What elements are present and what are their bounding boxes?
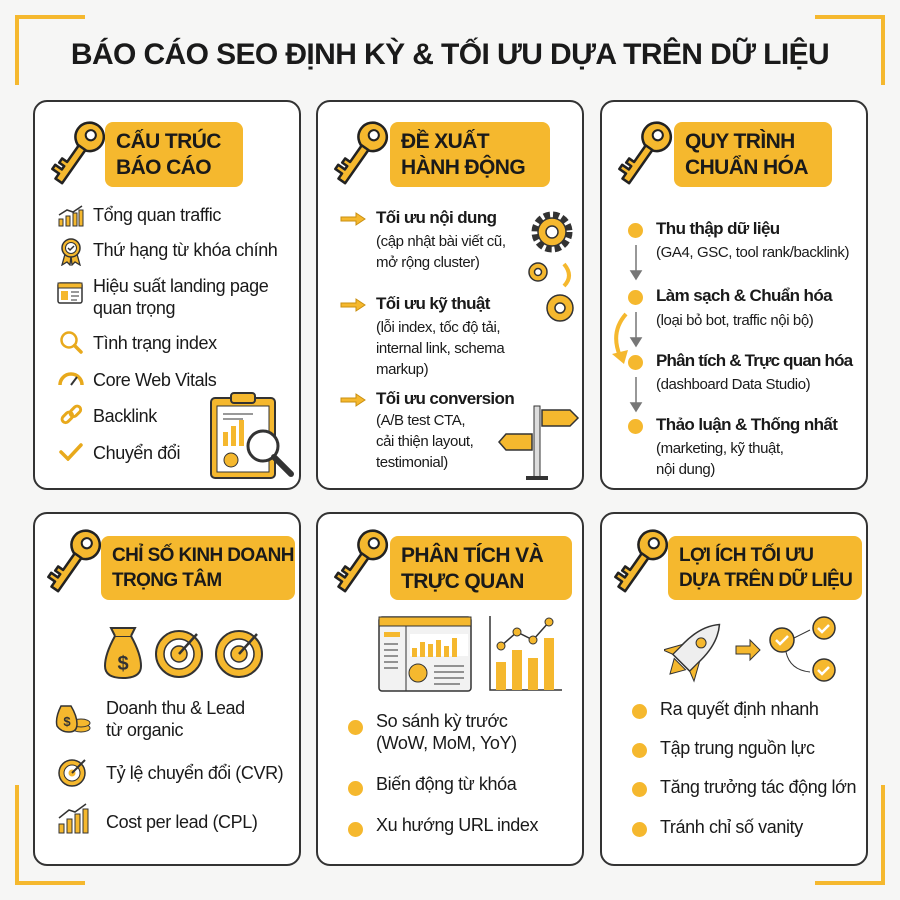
heading badge: TRỌNG TÂM — [112, 570, 222, 591]
heading badge — [390, 122, 550, 187]
panel: phân tích và trực quan — [316, 512, 584, 866]
process steps: (dashboard Data Studio) — [656, 376, 810, 393]
action list: Tối ưu conversion — [376, 389, 514, 408]
process steps: nội dung) — [656, 461, 715, 478]
heading badge: CHUẨN HÓA — [685, 156, 808, 179]
chart: bar + line — [489, 616, 562, 691]
heading badge: CẤU TRÚC — [116, 130, 221, 153]
list items: Core Web Vitals — [93, 370, 216, 390]
heading badge: LỢI ÍCH TỐI ƯU — [679, 545, 813, 566]
action list: mở rộng cluster) — [376, 254, 479, 271]
panel: quy trình chuẩn hóa — [600, 100, 868, 490]
action list: cải thiện layout, — [376, 433, 473, 450]
list items: Tổng quan traffic — [93, 205, 221, 225]
icon: key — [51, 121, 105, 184]
metric list: Tỷ lệ chuyển đổi (CVR) — [106, 763, 283, 783]
icon: gears — [528, 212, 574, 322]
metric list: Cost per lead (CPL) — [106, 812, 257, 832]
heading badge: CHỈ SỐ KINH DOANH — [112, 545, 294, 566]
process steps: Thảo luận & Thống nhất — [656, 415, 837, 434]
action list: (cập nhật bài viết cũ, — [376, 233, 506, 250]
heading badge — [105, 122, 243, 187]
chart: dashboard — [378, 616, 472, 692]
process steps: (GA4, GSC, tool rank/backlink) — [656, 244, 849, 261]
action list — [340, 208, 514, 471]
list items: Backlink — [93, 406, 157, 426]
heading badge — [674, 122, 832, 187]
heading badge: ĐỀ XUẤT — [401, 130, 489, 153]
icon: key — [334, 121, 388, 184]
action list: internal link, schema — [376, 340, 504, 357]
list items: quan trọng — [93, 298, 175, 318]
panel: cấu trúc báo cáo — [33, 100, 301, 490]
process steps: Làm sạch & Chuẩn hóa — [656, 286, 832, 305]
heading badge: BÁO CÁO — [116, 156, 211, 179]
bullet list: Tránh chỉ số vanity — [660, 817, 803, 837]
heading badge — [668, 536, 862, 600]
list items — [57, 205, 277, 463]
heading badge — [101, 536, 295, 600]
process steps: Phân tích & Trực quan hóa — [656, 351, 852, 370]
list items: Thứ hạng từ khóa chính — [93, 240, 277, 260]
heading badge: HÀNH ĐỘNG — [401, 156, 525, 179]
icon: clipboard report — [210, 392, 294, 479]
list items: Chuyển đổi — [93, 443, 180, 463]
bullet list: Tập trung nguồn lực — [660, 738, 815, 758]
panel: đề xuất hành động — [316, 100, 584, 490]
heading badge — [390, 536, 572, 600]
icon: rocket to checks — [664, 616, 836, 682]
bullet list — [348, 711, 538, 837]
icons: money bag & targets: $ — [117, 653, 129, 675]
arrow: curved — [612, 312, 628, 364]
bullet list: Ra quyết định nhanh — [660, 699, 819, 719]
bullet list: Xu hướng URL index — [376, 815, 538, 835]
heading badge: QUY TRÌNH — [685, 130, 795, 153]
action list: markup) — [376, 361, 428, 378]
bullet list: Biến động từ khóa — [376, 774, 516, 794]
list items: Hiệu suất landing page — [93, 276, 268, 296]
action list: (A/B test CTA, — [376, 412, 465, 429]
icon: key — [47, 529, 101, 592]
action list: (lỗi index, tốc độ tải, — [376, 319, 500, 336]
metric list: Doanh thu & Lead — [106, 698, 245, 718]
heading badge: TRỰC QUAN — [401, 570, 524, 593]
icon: signpost — [498, 406, 579, 480]
process steps: (marketing, kỹ thuật, — [656, 440, 784, 457]
process steps — [612, 219, 854, 478]
heading badge: DỰA TRÊN DỮ LIỆU — [679, 570, 852, 591]
heading badge: PHÂN TÍCH VÀ — [401, 544, 543, 567]
bullet list — [632, 699, 856, 837]
metric list: từ organic — [106, 720, 183, 740]
list items: Tình trạng index — [93, 333, 217, 353]
panel: lợi ích tối ưu — [600, 512, 868, 866]
action list: Tối ưu kỹ thuật — [376, 294, 490, 313]
process steps: (loại bỏ bot, traffic nội bộ) — [656, 312, 813, 329]
bullet list: So sánh kỳ trước — [376, 711, 508, 731]
metric list — [56, 698, 283, 834]
action list: Tối ưu nội dung — [376, 208, 496, 227]
icons: money bag & targets — [104, 627, 263, 679]
icon: key — [618, 121, 672, 184]
action list: testimonial) — [376, 454, 448, 471]
title: BÁO CÁO SEO ĐỊNH KỲ & TỐI ƯU DỰA TRÊN DỮ LIỆU — [71, 38, 829, 71]
metric list: $ — [63, 714, 71, 729]
bullet list: Tăng trưởng tác động lớn — [660, 777, 856, 797]
process steps: Thu thập dữ liệu — [656, 219, 780, 238]
panel: chỉ số kinh doanh — [33, 512, 301, 866]
icon: key — [614, 529, 668, 592]
bullet list: (WoW, MoM, YoY) — [376, 733, 517, 753]
icon: key — [334, 529, 388, 592]
